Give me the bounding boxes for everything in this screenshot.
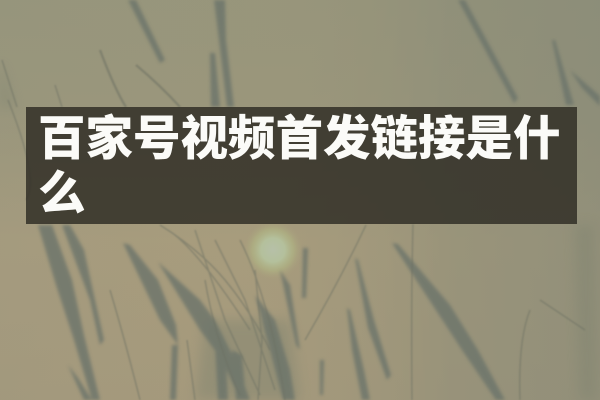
title panel bbox=[26, 107, 577, 224]
sun glow bbox=[243, 220, 303, 280]
title: 百家号视频首发链接是什么 bbox=[38, 113, 560, 221]
